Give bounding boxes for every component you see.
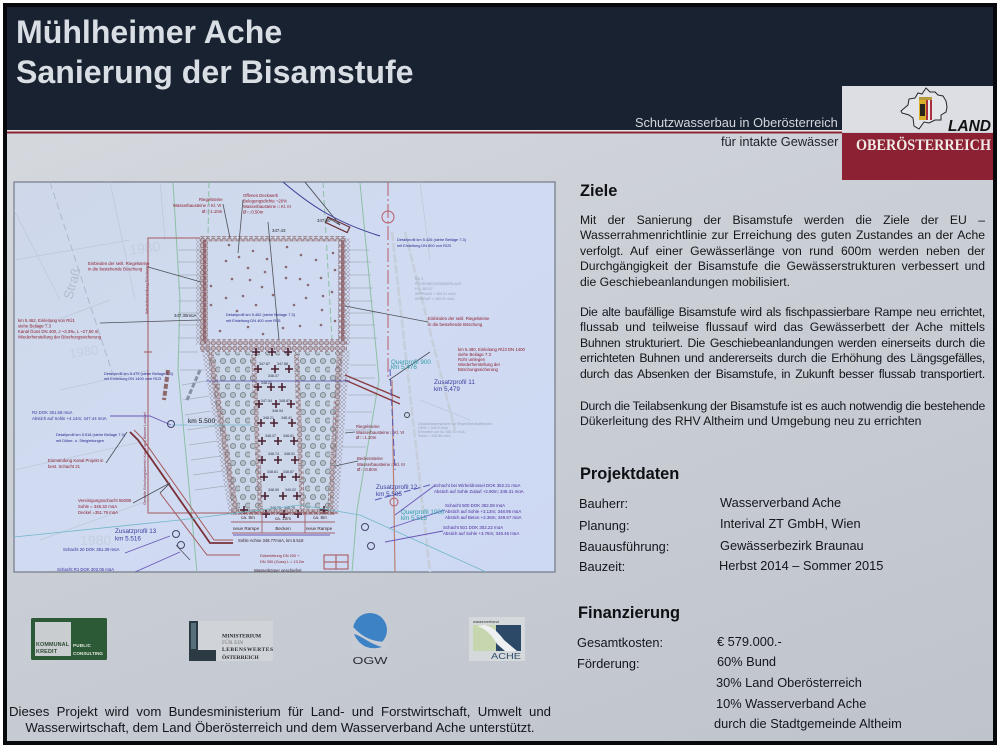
drawing annotations blue: Schacht R1 DOK 302.05 müA (57, 567, 114, 572)
diagonal culvert (130, 176, 400, 555)
elevation labels: 347.35müA (174, 313, 197, 318)
text: Ziele paragraph 2: Die alte baufällige Bisamstufe wird als fischpassierbare Rampe neu errichtet, (580, 305, 985, 319)
faint grey specification: WSPRa/F = 350.91 müA (415, 297, 455, 301)
logo: Ministerium: MINISTERIUM (222, 634, 262, 640)
trapezoid ramp stones: 348.41 (281, 416, 292, 420)
faint grey specification: OKW = 349.0 müA (418, 426, 449, 430)
trapezoid ramp stones: 348.94 (272, 409, 283, 413)
trapezoid ramp stones: 348.91 (284, 452, 295, 456)
text: Finanzierung heading: Finanzierung (578, 604, 680, 622)
title line 2: Sanierung der Bisamstufe (16, 54, 414, 90)
trapezoid ramp stones: 348.87 (283, 470, 294, 474)
text: Ziele paragraph 2: errichteten Buhnen und andererseits durch die Erhöhung des Längsgefälles, (580, 351, 985, 365)
logo: Ministerium: ÖSTERREICH (222, 654, 259, 661)
drawing annotations blue: mit Düker- u. Steigleitungen (56, 438, 104, 443)
drawing annotations red (18, 193, 525, 515)
text: Finanzierung rows: durch die Stadtgemeinde Altheim (714, 716, 902, 731)
text: Ziele paragraph 3: Durch die Teilabsenkung der Bisamstufe ist es auch notwendig die bestehende (580, 399, 985, 413)
panel: site plan drawing: Gestalte Böschungsbereich Kanal und Wasser LandArt (143, 411, 147, 505)
brown bracket (144, 238, 232, 513)
drawing annotations red: siehe Beilage 7.3 (458, 352, 492, 357)
logo: Ministerium: FÜR EIN (222, 639, 243, 646)
drawing annotations red: Wasserbausteine □ Kl. VI (173, 203, 221, 208)
drawing annotations red: Kanal Guss DN 400, J ~3.3‰, L ~27,50 m (18, 329, 99, 334)
logo: Kommunalkredit: KOMMUNAL (36, 642, 70, 648)
text: Ziele paragraph 1 (580, 213, 986, 289)
drawing annotations red: km 5.462, Einleitung von RÜ1 (18, 318, 75, 323)
drawing annotations red: Ø □ 1.10m (356, 435, 377, 440)
upper rectangle stones (196, 236, 350, 352)
icon: Upper Austria map with crest (901, 88, 947, 129)
text: Finanzierung rows: Förderung: (577, 656, 640, 671)
bottom ramp table: neue Rampe (233, 526, 260, 531)
blue and purple pipes (14, 182, 486, 572)
faint grey specification: H = 353.47 (415, 287, 433, 291)
logo: OGW (352, 613, 388, 667)
panel: site plan drawing: 1980 (128, 238, 161, 258)
trapezoid ramp stones: 348.75 (284, 506, 295, 510)
text: Ziele paragraph 2: Buhnen strukturiert. Die Geschiebeanlandungen werden einerseits durch die (580, 336, 985, 350)
elevation labels (174, 218, 331, 318)
bottom ramp table: ca. 10m (275, 516, 291, 521)
bottom ramp table: DN 300 (Guss) L = 13.2m (260, 559, 304, 564)
drawing annotations blue: Detailprofil km 5.426 (siehe Beilage 7.3) (397, 237, 467, 242)
drawing annotations red: Sohle = 348.32 müA (78, 504, 117, 509)
text: Projektdaten rows: Interival ZT GmbH, Wien (720, 516, 861, 531)
text: Projektdaten rows: Planung: (579, 518, 630, 533)
trapezoid ramp stones: 349.02 (285, 488, 296, 492)
text: Ziele paragraph 1: Mit der Sanierung der Bisamstufe werden die Ziele der EU – (580, 213, 985, 227)
drawing annotations red: in die bestehende Böschung (88, 266, 143, 272)
bottom ramp table (231, 513, 348, 573)
faint grey specification: Einhalten auf Su 354.70 müA (418, 430, 465, 434)
drawing annotations blue (32, 237, 524, 572)
bottom ramp table: neue Rampe (306, 526, 333, 531)
green bank lines (173, 182, 379, 572)
text: Ziele paragraph 1: Wasserrahmenrichtlinie zur Erreichung des guten Zustandes an der Ache (580, 228, 985, 242)
trapezoid ramp stones: 348.90 (268, 488, 279, 492)
trapezoid ramp stones: 348.87 (279, 399, 290, 403)
red divider line (7, 130, 842, 134)
text: Ziele paragraph 3 (580, 399, 985, 428)
cross section labels: km 5,479 (434, 386, 460, 393)
cross section labels: km 5.476 (391, 364, 417, 371)
cross section labels: Querprofil 900 (391, 359, 431, 366)
text: funding acknowledgement: Wasserwirtschaft, dem Land Öberösterreich und dem Wasserverband Ache unterstützt. (25, 720, 535, 734)
text: funding acknowledgement: Dieses Projekt wird vom Bundesministerium für Land- und Forstwirtschaft, Umwelt und (9, 704, 551, 719)
logo: Wasserverband Ache: wasserverband (473, 620, 499, 624)
logo: Kommunalkredit: KREDIT (36, 649, 58, 655)
drawing annotations red: best. Schacht 21 (48, 464, 81, 469)
elevation labels: 347.60 (317, 218, 331, 223)
groyne tick lines (178, 250, 377, 490)
faint grey specification (415, 277, 492, 438)
faint road and background cadastre (14, 182, 470, 572)
drawing annotations blue: Abstich auf Sohle +3.13m; 348.95 müA (445, 509, 521, 514)
drawing annotations blue: Schacht bei Wirbeldrossel DOK 352.21 müA (434, 483, 520, 488)
cross section labels: km 5.505 (376, 491, 402, 498)
drawing annotations red: Riegelsteine (356, 424, 380, 429)
boulder crosses (240, 348, 328, 518)
panel: site plan drawing: Wiederherstellung Böschung (145, 265, 149, 314)
drawing annotations blue: R2 DOK 351.58 müA (32, 410, 72, 415)
drawing annotations red: km 5.480, Einleitung RÜ3 DN 1400 (458, 347, 525, 352)
cross section labels: Zusatzprofil 12 (376, 484, 418, 491)
trapezoid ramp stones: 347.87 (259, 362, 270, 366)
tagline on header: Schutzwasserbau in Oberösterreich (635, 115, 838, 130)
drawing annotations blue: Detailprofil km 5.518 (siehe Beilage 7.3) (56, 432, 126, 437)
panel: site plan drawing: Straß (60, 266, 84, 301)
trapezoid ramp stones: 348.75 (270, 506, 281, 510)
drawing annotations blue: Abstich auf Sohle +3.76m; 348.46 müA (443, 531, 519, 536)
trapezoid ramp stones: 348.37 (265, 434, 276, 438)
trapezoid ramp stones: 347.88 (277, 362, 288, 366)
text: Finanzierung rows: Gesamtkosten: (577, 635, 663, 650)
drawing annotations red: Einbinden der seitl. Riegelsteine (88, 261, 150, 266)
panel: site plan drawing (13, 181, 556, 573)
drawing annotations red: Deckel =351.79 müA (78, 510, 118, 515)
text: Finanzierung rows (577, 634, 902, 731)
km marker: km 5.500 (188, 418, 215, 425)
drawing annotations red: Ø □ 0.80m (357, 467, 378, 472)
logo: Wasserverband Ache: ACHE (491, 652, 521, 661)
trapezoid ramp stones: 348.21 (261, 381, 272, 385)
trapezoid ramp stones: 347.54 (261, 399, 272, 403)
bottom ramp table: Becken (275, 526, 291, 531)
logo: Wasserverband Ache (469, 617, 525, 661)
drawing annotations red: Einbinden der seitl. Riegelsteine (428, 316, 490, 321)
drawing annotations red: Wiederherstellung der Böschungssicherung (18, 334, 102, 340)
elevation labels: 347.43 (272, 228, 286, 233)
text: Ziele paragraph 2: flussab und teilweise flussauf wird das Gewässerbett der Ache mittels (580, 320, 985, 334)
scattered boulders (210, 244, 336, 335)
header band (7, 7, 993, 130)
drawing annotations blue: Detailprofil km 5.479 (siehe Beilage 7.3) (104, 371, 174, 376)
text: Finanzierung rows: 60% Bund (717, 654, 776, 669)
text: Projektdaten rows: Gewässerbezirk Braunau (720, 538, 864, 553)
trapezoid ramp stones: 348.74 (268, 452, 279, 456)
text: Projektdaten rows: Wasserverband Ache (720, 495, 841, 510)
drawing annotations blue: mit Einleitung DN 400 vom RÜ1 (226, 318, 281, 323)
title line 1: Mühlheimer Ache (16, 14, 282, 50)
bottom ramp table: Dükerleitung DN 200 + (260, 553, 300, 558)
faint grey specification: WSPRa/W = 350.91 müA (415, 292, 456, 296)
drawing annotations blue: Schacht 501 DOK 302.22 müA (443, 525, 503, 530)
logo: Kommunalkredit: PUBLIC (73, 643, 92, 648)
text: Ziele paragraph 1: verfolgt. Auf einer Gewässerlänge von rund 600m werden neben der (580, 244, 985, 258)
drawing annotations red: Wasserbausteine □ Kl. III (243, 204, 291, 209)
red leader lines (100, 200, 430, 560)
logo: OGW: OGW (352, 656, 388, 667)
text: Ziele heading: Ziele (580, 182, 617, 200)
text: funding acknowledgement (9, 704, 551, 734)
logo word LAND: LAND (948, 118, 991, 135)
drawing annotations blue: Detailprofil km 5.462 (siehe Beilage 7.3) (226, 312, 296, 317)
faint grey specification: Sohle = 348.86 müA (418, 434, 451, 438)
cross section labels: Zusatzprofil 13 (115, 528, 157, 535)
bottom ramp table: ca. 8m (241, 515, 255, 520)
text: Finanzierung rows: € 579.000.- (717, 634, 782, 649)
drawing annotations red: Wasserbausteine □ Kl. III (357, 462, 405, 467)
drawing annotations blue: Schacht 20 DOK 351.39 müA (63, 547, 120, 552)
trapezoid ramp stones (201, 345, 350, 518)
logo: Ministerium (189, 621, 273, 661)
drawing annotations red: Offenes Deckwerk (243, 193, 279, 198)
text: Finanzierung rows: 10% Wasserverband Ache (716, 696, 866, 711)
trapezoid ramp stones: 348.61 (283, 434, 294, 438)
text: Projektdaten rows (579, 495, 883, 574)
panel: site plan drawing: 1980 (68, 342, 99, 361)
text: Ziele paragraph 3: Dükerleitung des RHV Altheim und Umgebung neu zu errichten (580, 414, 921, 428)
panel: site plan drawing: 1980 (80, 532, 111, 548)
bottom ramp table: Sohle Achse 348.77müA, km 5.518 (238, 538, 304, 543)
cross section labels: km 5.516 (115, 536, 141, 542)
bottom ramp table: ca. 8m (313, 515, 327, 520)
cross section labels: km 5.515 (401, 515, 427, 522)
bottom ramp table: Wasserkörper geschiefert (254, 568, 302, 573)
cross section labels: Querprofil 1000 (401, 509, 445, 516)
text: Ziele paragraph 2: durch das Absenken der Bisamstufe, in Zukunft besser flussab transportiert. (580, 367, 985, 381)
drawing annotations blue: mit Einleitung DN 800 von RÜ3 (397, 243, 451, 248)
drawing annotations blue: Abstich auf Sohle Zulauf +2.90m; 349.31 müA (434, 489, 524, 494)
red station axis (382, 182, 398, 572)
drawing annotations red: in die bestehende Böschung (428, 322, 483, 327)
drawing annotations red: Ø □ 0.50m (243, 210, 264, 214)
text: Ziele paragraph 2 (580, 305, 985, 381)
drawing annotations red: Belegungsdichte ~20% (243, 198, 287, 204)
drawing annotations red: Beckensteine (357, 456, 383, 461)
faint grey specification: RU 3 (415, 277, 423, 281)
trapezoid ramp stones: 348.21 (263, 416, 274, 420)
drawing annotations blue: Abstich auf Beton +2.38m; 349.67 müA (445, 515, 522, 520)
text: Finanzierung rows: 30% Land Oberösterreich (716, 675, 862, 690)
drawing annotations red: Wiederherstellung der (458, 362, 501, 367)
drawing annotations red: Böschungssicherung (458, 367, 499, 372)
drawing annotations red: Einmündung Kanal Projekt in (48, 458, 104, 463)
drawing annotations red: siehe Beilage 7.3 (18, 324, 52, 328)
text: Projektdaten rows: Bauzeit: (579, 559, 625, 574)
drawing annotations red: Wasserbausteine □ Kl. VI (356, 430, 404, 435)
text: Projektdaten rows: Herbst 2014 – Sommer 2015 (719, 558, 883, 573)
tagline below header: für intakte Gewässer (721, 134, 838, 149)
text: Ziele paragraph 1: Durchgängigkeit der Bisamstufe die Gewässerstrukturen verbessert und (580, 259, 985, 273)
logo: Kommunalkredit: CONSULTING (73, 651, 103, 656)
cross section labels: Zusatzprofil 11 (434, 379, 475, 386)
text: Projektdaten rows: Bauherr: (579, 496, 628, 511)
cross section labels (115, 359, 475, 542)
drawing annotations red: Ø □ 1.10m (202, 209, 223, 214)
trapezoid ramp stones: 348.07 (268, 374, 279, 378)
drawing annotations blue: mit Einleitung DN 1400 vom RÜ3 (104, 376, 161, 381)
logo: Kommunalkredit (31, 618, 107, 660)
drawing annotations red: Vereinigungsschacht 5500B (78, 498, 131, 503)
text: Projektdaten heading: Projektdaten (580, 465, 679, 483)
faint grey specification: REGENBECKENÜBERLAUF (415, 282, 463, 286)
text: Projektdaten rows: Bauausführung: (579, 539, 669, 554)
logo: Ministerium: LEBENSWERTES (222, 647, 273, 653)
drawing annotations blue: Abstich auf Sohle +4.14m; 347.44 müA (32, 416, 107, 421)
trapezoid ramp stones: 348.61 (267, 470, 278, 474)
drawing annotations blue: Schacht 500 DOK 352.08 müA (445, 503, 505, 508)
drawing annotations red: Rohr umlegen (458, 357, 486, 362)
drawing annotations red: Riegelsteine (199, 197, 223, 202)
faint grey specification: Zulaufwassersystem für Regenüberlaufbecken (418, 422, 492, 426)
text: Ziele paragraph 1: die Geschiebeanlandungen mobilisiert. (580, 275, 790, 289)
